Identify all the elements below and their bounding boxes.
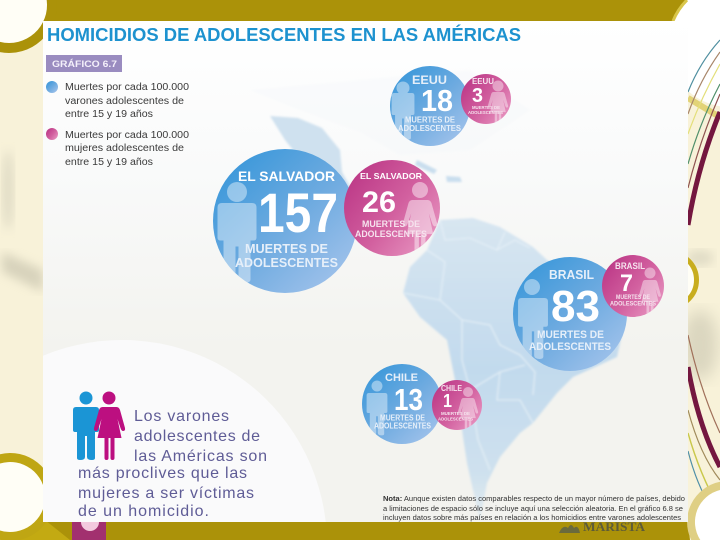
bubble: Chile female: CHILE [441,384,463,393]
text block: key message [78,408,267,520]
legend: male entry [46,81,189,120]
bubble: Chile male: 13 [394,382,423,417]
gold band: bottom [0,516,690,540]
text block: key message: adolescentes de [134,428,260,445]
map: mexico and central america [270,116,400,215]
bubble: Brasil female: ADOLESCENTES [610,302,656,308]
decoration: top-right white circle [668,0,720,106]
bubble: EEUU male: ADOLESCENTES [398,124,462,133]
map of the Americas [250,70,628,521]
legend: female entry: mujeres adolescentes de [65,143,184,154]
decoration: bottom-left ring [0,453,54,540]
bubble: El Salvador male: 157 [258,181,338,244]
legend [46,81,189,168]
bubble: El Salvador female: ADOLESCENTES [355,229,427,239]
bubble: El Salvador female: 26 [362,186,396,219]
bubble: Chile male: CHILE [385,372,418,384]
text block: key message: más proclives que las [78,465,247,482]
text block: note: a limitaciones de espacio sólo se incluye aquí una selección aleatoria. En el gráfico 6.8 se [383,504,683,513]
text block: key message: las Américas son [134,448,267,465]
bubble: EEUU female: MUERTES DE [472,105,500,110]
legend: female entry [46,128,189,168]
chart tag [46,55,122,72]
bubble: El Salvador male: EL SALVADOR [238,168,335,184]
bubble: Chile male: ADOLESCENTES [374,422,432,430]
bubble: Brasil female: BRASIL [615,261,645,271]
bubble: Brasil female [602,255,664,317]
logo: Marista: MARISTA [583,520,645,534]
bubble: Brasil male [513,257,627,371]
bubble: EEUU female: EEUU [472,77,494,86]
text block: note: incluyen datos sobre más países en relación a los homicidios entre varones adolescentes [383,513,681,522]
icon: boy and girl [73,392,125,460]
bubble: Brasil male: 83 [551,282,600,331]
map: country borders [403,220,535,470]
bubble: Brasil male: MUERTES DE [537,329,604,341]
bubble: Chile male: MUERTES DE [380,414,426,422]
bubble: EEUU female [461,74,511,126]
decoration: top-left ring [0,0,57,53]
bubble: Brasil female: MUERTES DE [616,295,650,301]
bubble: Chile male [362,364,442,444]
map: south america [403,218,628,521]
legend: female entry: Muertes por cada 100.000 [65,130,189,141]
map: caribbean [415,160,462,182]
map: north america [250,70,530,155]
decoration: right side curved lines [688,40,720,517]
bubble: Chile female [432,380,482,432]
bubble: El Salvador female: MUERTES DE [362,219,420,229]
text block: key message: de un homicidio. [78,503,209,520]
bubble: El Salvador female [344,160,440,258]
logo: Marista [559,520,645,534]
title: HOMICIDIOS DE ADOLESCENTES EN LAS AMÉRICAS [47,24,521,45]
bubble: Brasil male: ADOLESCENTES [529,341,611,353]
bubble: El Salvador male [213,149,357,293]
legend: male entry: varones adolescentes de [65,96,184,107]
bubble: Chile female: 1 [443,391,452,411]
bubble: EEUU female: 3 [472,85,483,107]
bubble: El Salvador female: EL SALVADOR [360,171,422,181]
logo: page badge [72,522,106,540]
text block: key message: mujeres a ser víctimas [78,485,254,502]
legend: male entry: entre 15 y 19 años [65,109,153,120]
bubble: Brasil male: BRASIL [549,268,594,282]
bubble: El Salvador male: ADOLESCENTES [235,255,338,270]
bubble: EEUU female: ADOLESCENTES [468,110,503,115]
text block: note: Nota: Aunque existen datos comparables respecto de un mayor número de países, debido [383,494,685,503]
decoration: bottom-right ring [687,482,720,540]
bubble: EEUU male: EEUU [412,73,447,87]
bubble: El Salvador male: MUERTES DE [245,241,328,256]
decoration: right-middle ring [642,253,696,307]
legend: female entry: entre 15 y 19 años [65,157,153,168]
bubble: Chile female: MUERTES DE [441,411,470,416]
bubble: Brasil female: 7 [620,270,633,297]
legend: male entry: Muertes por cada 100.000 [65,82,189,93]
text block: key message: Los varones [134,408,229,425]
text block: note [383,494,685,522]
bubble: Chile female: ADOLESCENTES [438,416,473,422]
chart tag: GRÁFICO 6.7 [52,59,117,70]
gold band: top [40,0,690,21]
bubble: EEUU male: MUERTES DE [405,116,456,124]
bubble: EEUU male [390,66,470,146]
bubble: EEUU male: 18 [421,83,453,118]
